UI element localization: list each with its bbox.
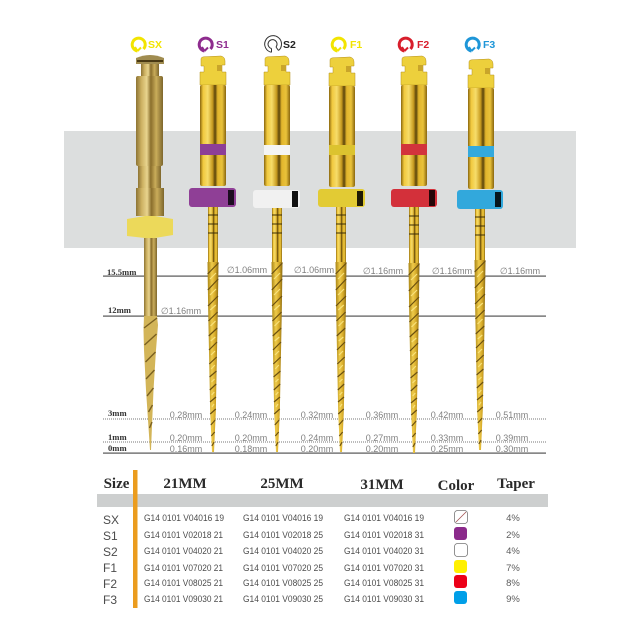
table headings: Taper bbox=[497, 476, 535, 492]
21MM codes bbox=[144, 513, 224, 604]
table headings: 21MM bbox=[163, 476, 207, 492]
tip measurements: 0.36mm bbox=[366, 410, 398, 420]
depth labels: 3mm bbox=[108, 408, 127, 418]
diameter labels: ∅1.16mm bbox=[161, 306, 201, 316]
tip measurements: 0.28mm bbox=[170, 410, 202, 420]
31MM codes: G14 0101 V02018 31 bbox=[344, 530, 424, 540]
size column: S2 bbox=[103, 545, 118, 559]
diameter labels: ∅1.16mm bbox=[500, 266, 540, 276]
measurement lines bbox=[103, 276, 546, 454]
depth labels: 0mm bbox=[108, 443, 127, 453]
file F3 bbox=[457, 59, 503, 450]
tip measurements: 0.20mm bbox=[170, 433, 202, 443]
tip measurements: 0.20mm bbox=[366, 444, 398, 454]
21MM codes: G14 0101 V07020 21 bbox=[144, 563, 223, 573]
21MM codes: G14 0101 V04020 21 bbox=[144, 546, 223, 556]
file legend icons bbox=[132, 36, 495, 52]
diameter labels: ∅1.06mm bbox=[294, 265, 334, 275]
taper column: 2% bbox=[506, 530, 520, 541]
25MM codes: G14 0101 V04016 19 bbox=[243, 513, 323, 523]
file legend icons: F2 bbox=[417, 39, 429, 51]
tip measurements: 0.42mm bbox=[431, 410, 463, 420]
taper column: 9% bbox=[506, 594, 520, 605]
file S2 bbox=[253, 56, 300, 452]
31MM codes: G14 0101 V04020 31 bbox=[344, 546, 424, 556]
table headings: 25MM bbox=[260, 476, 304, 492]
taper column: 8% bbox=[506, 578, 520, 589]
tip measurements: 0.24mm bbox=[235, 410, 267, 420]
25MM codes: G14 0101 V09030 25 bbox=[243, 594, 323, 604]
tip measurements: 0.39mm bbox=[496, 433, 528, 443]
tip measurements: 0.30mm bbox=[496, 444, 528, 454]
21MM codes: G14 0101 V04016 19 bbox=[144, 513, 224, 523]
25MM codes: G14 0101 V04020 25 bbox=[243, 546, 323, 556]
file legend icons: F3 bbox=[483, 39, 495, 51]
tip measurements: 0.32mm bbox=[301, 410, 333, 420]
taper column bbox=[506, 513, 520, 605]
31MM codes: G14 0101 V08025 31 bbox=[344, 578, 424, 588]
table header band bbox=[97, 494, 548, 507]
file legend icons: S2 bbox=[283, 39, 296, 51]
tip measurements: 0.51mm bbox=[496, 410, 528, 420]
taper column: 4% bbox=[506, 513, 520, 524]
tip measurements: 0.16mm bbox=[170, 444, 202, 454]
size column: SX bbox=[103, 513, 119, 527]
tip measurements: 0.18mm bbox=[235, 444, 267, 454]
size column: S1 bbox=[103, 529, 118, 543]
depth labels: 1mm bbox=[108, 432, 127, 442]
diameter labels: ∅1.06mm bbox=[227, 265, 267, 275]
tip measurements: 0.33mm bbox=[431, 433, 463, 443]
25MM codes bbox=[243, 513, 323, 604]
tip measurements: 0.20mm bbox=[301, 444, 333, 454]
tip measurements bbox=[170, 410, 528, 454]
depth labels: 12mm bbox=[108, 305, 132, 315]
file SX bbox=[127, 55, 173, 450]
25MM codes: G14 0101 V08025 25 bbox=[243, 578, 323, 588]
31MM codes: G14 0101 V09030 31 bbox=[344, 594, 424, 604]
25MM codes: G14 0101 V07020 25 bbox=[243, 563, 323, 573]
gray backdrop panel bbox=[64, 131, 576, 248]
file S1 bbox=[189, 56, 236, 452]
orange divider bbox=[133, 470, 138, 608]
tip measurements: 0.24mm bbox=[301, 433, 333, 443]
diameter labels bbox=[161, 265, 540, 316]
taper column: 4% bbox=[506, 546, 520, 557]
size column: F2 bbox=[103, 577, 117, 591]
tip measurements: 0.27mm bbox=[366, 433, 398, 443]
tip measurements: 0.20mm bbox=[235, 433, 267, 443]
depth labels bbox=[107, 267, 137, 453]
table headings: Size bbox=[104, 476, 130, 492]
table headings bbox=[104, 476, 535, 494]
table headings: 31MM bbox=[360, 477, 404, 493]
31MM codes: G14 0101 V07020 31 bbox=[344, 563, 424, 573]
21MM codes: G14 0101 V02018 21 bbox=[144, 530, 223, 540]
diameter labels: ∅1.16mm bbox=[363, 266, 403, 276]
depth labels: 15.5mm bbox=[107, 267, 137, 277]
25MM codes: G14 0101 V02018 25 bbox=[243, 530, 323, 540]
file F1 bbox=[318, 57, 365, 452]
file legend icons: SX bbox=[148, 39, 162, 51]
diameter labels: ∅1.16mm bbox=[432, 266, 472, 276]
file legend icons: S1 bbox=[216, 39, 229, 51]
21MM codes: G14 0101 V09030 21 bbox=[144, 594, 223, 604]
table headings: Color bbox=[438, 478, 475, 494]
file legend icons: F1 bbox=[350, 39, 362, 51]
size column: F1 bbox=[103, 561, 117, 575]
31MM codes: G14 0101 V04016 19 bbox=[344, 513, 424, 523]
31MM codes bbox=[344, 513, 424, 604]
taper column: 7% bbox=[506, 563, 520, 574]
tip measurements: 0.25mm bbox=[431, 444, 463, 454]
21MM codes: G14 0101 V08025 21 bbox=[144, 578, 223, 588]
color swatches bbox=[454, 510, 468, 604]
size column bbox=[103, 513, 119, 607]
size column: F3 bbox=[103, 593, 117, 607]
table bbox=[97, 470, 548, 608]
file F2 bbox=[391, 56, 437, 453]
